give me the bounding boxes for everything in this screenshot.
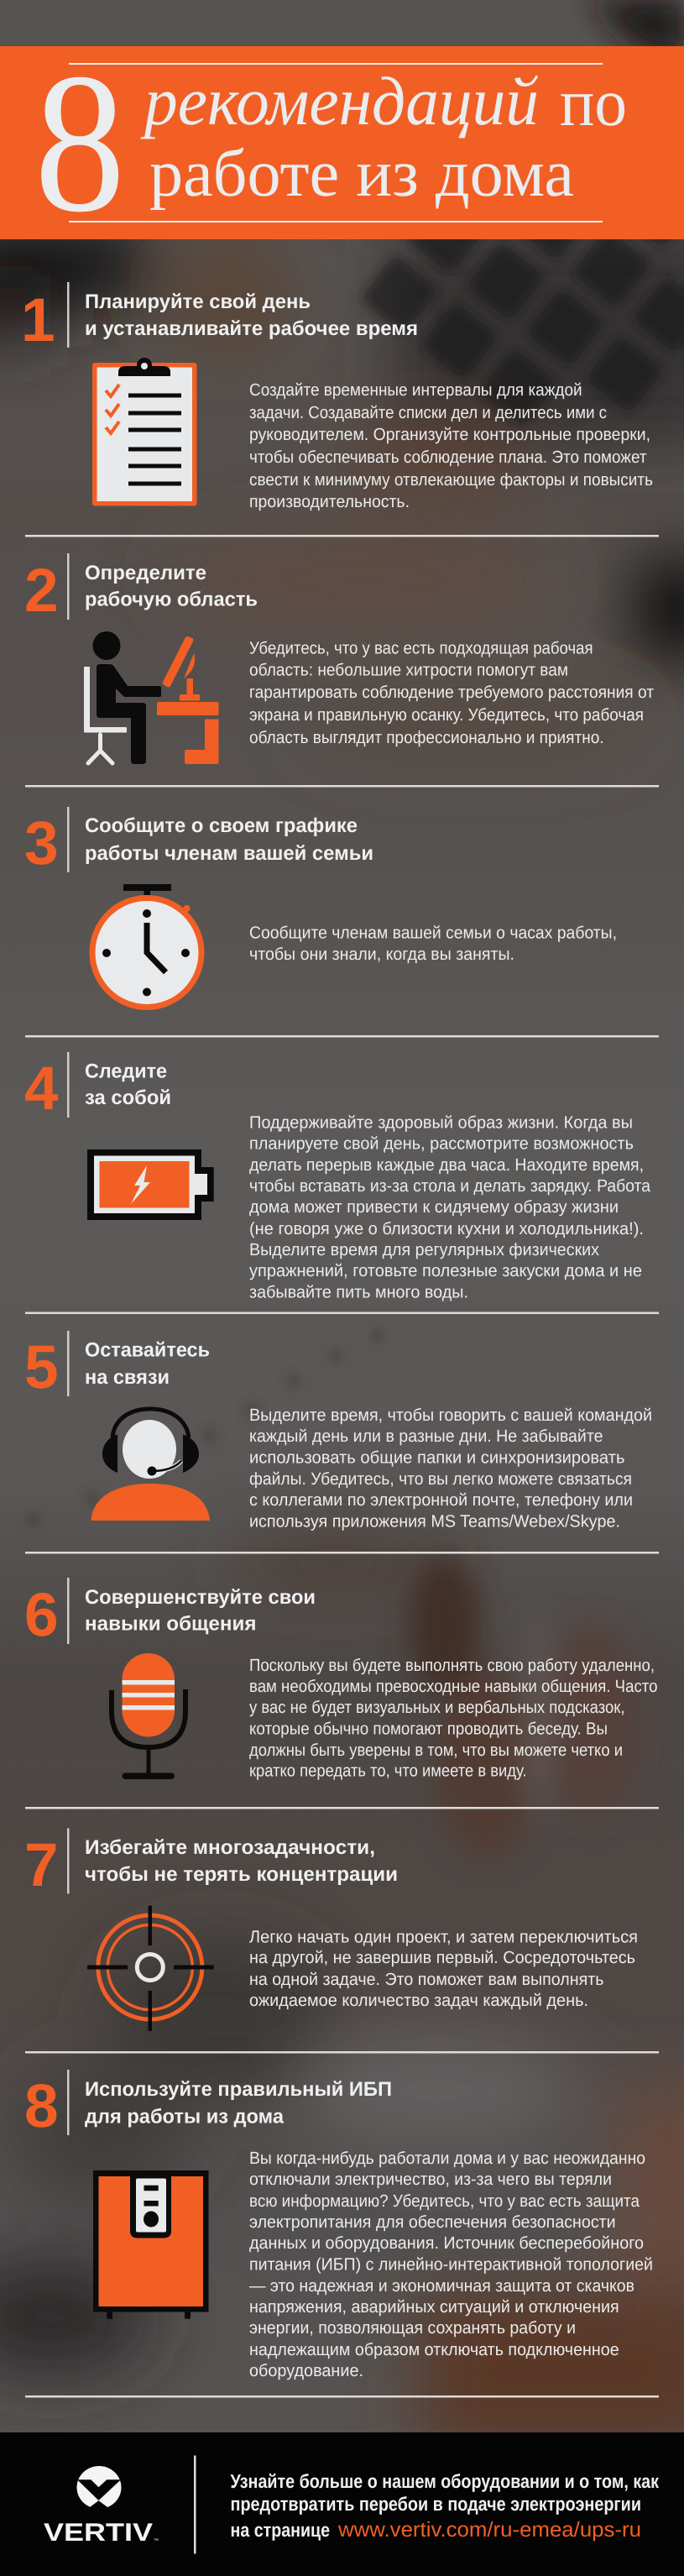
call to action <box>230 2470 659 2542</box>
body 6 <box>249 1656 658 1780</box>
body 4: (не говоря уже о близости кухни и холодильника!). <box>249 1219 644 1238</box>
body 8: напряжения, аварийных ситуаций и отключения <box>249 2297 619 2317</box>
footer <box>0 2432 684 2576</box>
body 7: на одной задаче. Это поможет вам выполнять <box>249 1970 604 1989</box>
number 5: 5 <box>24 1333 59 1401</box>
body 1: производительность. <box>249 492 410 511</box>
body 8: Вы когда-нибудь работали дома и у вас неожиданно <box>249 2149 645 2168</box>
heading 2: рабочую область <box>85 588 258 611</box>
number 4: 4 <box>24 1055 59 1123</box>
heading 8: Используйте правильный ИБП <box>85 2078 392 2101</box>
title: рекомендаций <box>140 63 539 139</box>
heading 8 <box>85 2078 392 2128</box>
body 7: на другой, не завершив первый. Сосредоточьтесь <box>249 1948 635 1967</box>
body 6: кратко передать то, что имеете в виду. <box>249 1762 527 1780</box>
icon: UPS unit <box>93 2170 208 2319</box>
heading 1 <box>85 291 418 340</box>
title: работе из дома <box>149 137 574 211</box>
heading 4: за собой <box>85 1086 171 1109</box>
body 4: делать перерыв каждые два часа. Находите время, <box>249 1155 644 1175</box>
logo: Vertiv: TM <box>154 2537 159 2542</box>
call to action: www.vertiv.com/ru-emea/ups-ru <box>337 2518 641 2542</box>
body 8: надлежащим образом отключать подключенное <box>249 2340 619 2359</box>
heading 7: чтобы не терять концентрации <box>85 1863 398 1886</box>
heading 6: Совершенствуйте свои <box>85 1586 316 1609</box>
title <box>140 63 627 211</box>
body 2: экрана и правильную осанку. Убедитесь, что рабочая <box>249 705 644 725</box>
body 4: Выделите время для регулярных физических <box>249 1240 600 1259</box>
icon: clipboard <box>92 358 196 505</box>
body 8: питания (ИБП) с линейно-интерактивной топологией <box>249 2255 653 2274</box>
body 8: энергии, позволяющая сохранять работу и <box>249 2318 576 2338</box>
logo: Vertiv: VERTIV <box>44 2519 153 2547</box>
heading 8: для работы из дома <box>85 2106 285 2128</box>
body 7 <box>249 1928 638 2010</box>
body 1: задачи. Создавайте списки дел и делитесь ими с <box>249 403 607 422</box>
body 4: упражнений, готовьте полезные закуски дома и не <box>249 1261 642 1280</box>
body 8: — это надежная и экономичная защита от скачков <box>249 2276 634 2296</box>
heading 1: Планируйте свой день <box>85 291 311 313</box>
section 1 <box>21 282 653 511</box>
body 5: файлы. Убедитесь, что вы легко можете связаться <box>249 1469 632 1489</box>
heading 5: Оставайтесь <box>85 1338 210 1362</box>
heading 2 <box>85 562 258 611</box>
icon: headset operator <box>91 1409 210 1521</box>
title: по <box>560 66 627 140</box>
number 3: 3 <box>24 809 59 877</box>
body 7: Легко начать один проект, и затем переключиться <box>249 1928 638 1946</box>
body 1: чтобы обеспечивать соблюдение плана. Это поможет <box>249 448 647 467</box>
body 2: Убедитесь, что у вас есть подходящая рабочая <box>249 638 593 658</box>
body 1 <box>249 380 653 511</box>
numeral 8: 8 <box>34 33 125 254</box>
logo: Vertiv <box>44 2466 159 2547</box>
section 8 <box>24 2070 653 2380</box>
number 6: 6 <box>24 1581 59 1649</box>
body 7: ожидаемое количество задач каждый день. <box>249 1991 588 2010</box>
body 3 <box>249 924 617 964</box>
heading 3: работы членам вашей семьи <box>85 842 373 865</box>
number 8: 8 <box>24 2072 59 2140</box>
body 4 <box>249 1113 651 1301</box>
body 1: руководителем. Организуйте контрольные проверки, <box>249 425 650 444</box>
body 2: гарантировать соблюдение требуемого расстояния от <box>249 683 655 702</box>
heading 4 <box>85 1060 171 1109</box>
number 1: 1 <box>21 286 55 354</box>
body 3: Сообщите членам вашей семьи о часах работы, <box>249 924 617 942</box>
body 1: Создайте временные интервалы для каждой <box>249 380 582 400</box>
section 5 <box>24 1331 652 1531</box>
body 5 <box>249 1406 652 1531</box>
icon: microphone <box>112 1653 185 1779</box>
heading 3: Сообщите о своем графике <box>85 814 358 837</box>
section 4 <box>24 1052 651 1301</box>
body 6: у вас не будет визуальных и вербальных подсказок, <box>249 1698 624 1717</box>
section 2 <box>24 553 655 764</box>
body 8: электропитания для обеспечения безопасности <box>249 2212 616 2232</box>
body 5: использовать общие папки и синхронизировать <box>249 1448 624 1468</box>
body 5: используя приложения MS Teams/Webex/Skype. <box>249 1511 620 1531</box>
body 3: чтобы они знали, когда вы заняты. <box>249 945 514 964</box>
number 2: 2 <box>24 557 59 625</box>
body 8: данных и оборудования. Источник бесперебойного <box>249 2233 644 2253</box>
heading 4: Следите <box>85 1060 167 1083</box>
body 8 <box>249 2149 653 2380</box>
body 5: каждый день или в разные дни. Не забывайте <box>249 1427 603 1446</box>
body 4: Поддерживайте здоровый образ жизни. Когда вы <box>249 1113 633 1132</box>
heading 2: Определите <box>85 562 206 584</box>
heading 7 <box>85 1836 398 1886</box>
heading 6 <box>85 1586 316 1636</box>
icon: target <box>87 1906 214 2031</box>
section 7 <box>24 1829 638 2031</box>
icon: person at desk <box>84 631 218 764</box>
body 2: область выглядит профессионально и приятно. <box>249 728 604 747</box>
header band <box>0 33 684 254</box>
body 6: которые обычно помогают проводить беседу. Вы <box>249 1720 608 1738</box>
body 8: оборудование. <box>249 2361 363 2380</box>
heading 7: Избегайте многозадачности, <box>85 1836 375 1859</box>
number 7: 7 <box>24 1831 59 1899</box>
heading 1: и устанавливайте рабочее время <box>85 317 418 340</box>
body 4: дома может привести к сидячему образу жизни <box>249 1197 619 1217</box>
section 6 <box>24 1578 658 1780</box>
call to action: на странице <box>230 2519 330 2541</box>
section 3 <box>24 807 617 1008</box>
body 4: чтобы вставать из-за стола и делать зарядку. Работа <box>249 1176 651 1196</box>
heading 5 <box>85 1338 210 1389</box>
heading 3 <box>85 814 373 865</box>
body 4: забывайте пить много воды. <box>249 1283 468 1301</box>
body 8: отключали электричество, из-за чего вы теряли <box>249 2170 612 2189</box>
body 6: Поскольку вы будете выполнять свою работу удаленно, <box>249 1656 655 1675</box>
icon: stopwatch <box>92 884 201 1008</box>
body 8: всю информацию? Убедитесь, что у вас есть защита <box>249 2191 640 2211</box>
icon: battery <box>87 1149 214 1220</box>
body 5: Выделите время, чтобы говорить с вашей командой <box>249 1406 652 1425</box>
body 2 <box>249 638 655 747</box>
body 2: область: небольшие хитрости помогут вам <box>249 660 568 680</box>
body 4: планируете свой день, рассмотрите возможность <box>249 1134 634 1154</box>
heading 5: на связи <box>85 1366 170 1389</box>
body 6: должны быть уверены в том, что вы можете четко и <box>249 1741 623 1760</box>
heading 6: навыки общения <box>85 1612 257 1636</box>
body 1: свести к минимуму отвлекающие факторы и повысить <box>249 470 653 490</box>
body 5: с коллегами по электронной почте, телефону или <box>249 1490 633 1510</box>
